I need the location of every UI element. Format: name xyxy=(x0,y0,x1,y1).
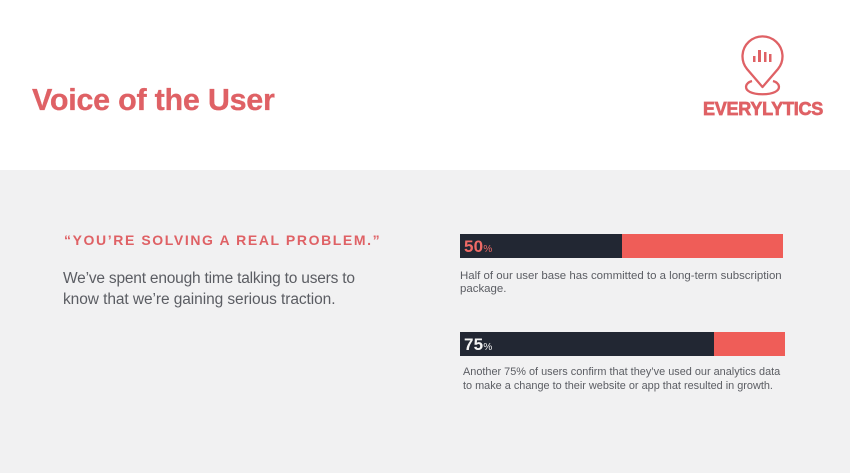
bar: 50 percent xyxy=(460,234,783,258)
caption for 50 percent xyxy=(460,270,782,294)
caption for 75 percent: Another 75% of users confirm that they’ve used our analytics data xyxy=(463,366,780,378)
value 75%: 75% xyxy=(464,335,492,354)
title: Voice of the User xyxy=(32,83,275,117)
caption for 75 percent xyxy=(463,366,780,392)
quote body text: We’ve spent enough time talking to users to xyxy=(63,270,355,287)
caption for 50 percent: Half of our user base has committed to a long-term subscription xyxy=(460,270,782,282)
bar filled segment xyxy=(460,234,622,258)
caption for 50 percent: package. xyxy=(460,282,506,294)
logo wordmark: EVERYLYTICS xyxy=(703,99,823,119)
quote heading: “YOU’RE SOLVING A REAL PROBLEM.” xyxy=(64,232,381,248)
logo xyxy=(703,35,823,119)
value 50%: 50% xyxy=(464,237,492,256)
caption for 75 percent: to make a change to their website or app that resulted in growth. xyxy=(463,380,773,392)
bar filled segment xyxy=(460,332,714,356)
bar: 75 percent xyxy=(460,332,785,356)
icon: map pin with bars xyxy=(741,35,784,96)
quote body text: know that we’re gaining serious traction. xyxy=(63,290,335,308)
quote body text xyxy=(63,270,355,308)
background panel xyxy=(0,170,850,473)
